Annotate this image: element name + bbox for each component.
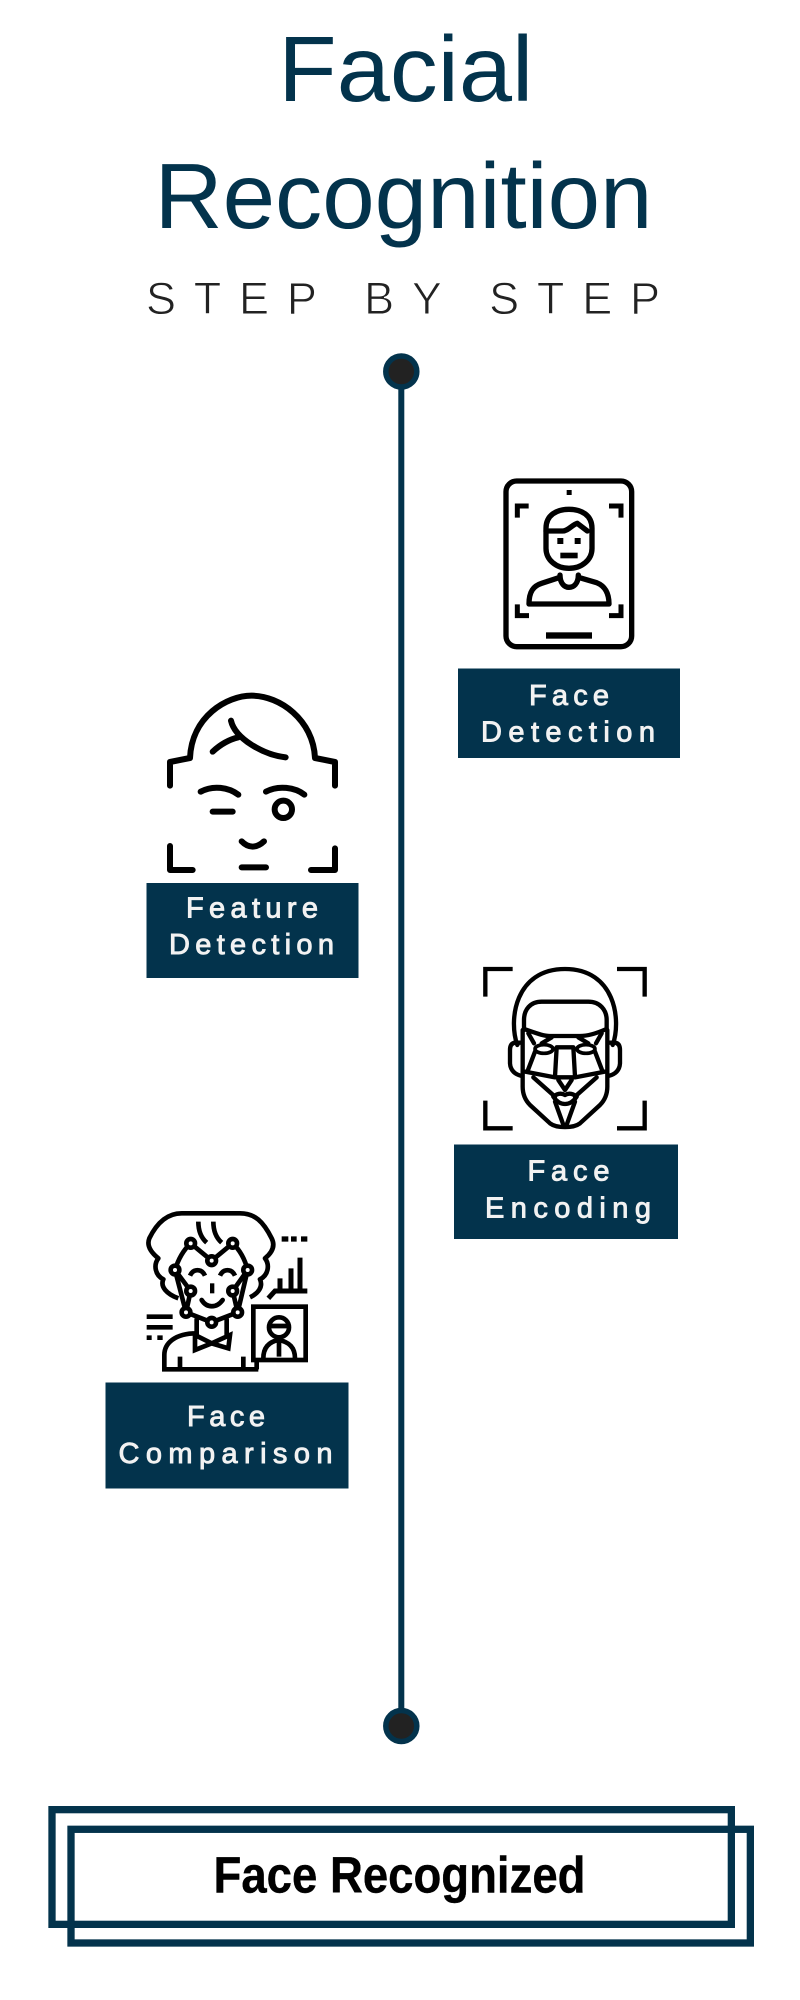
- label text: Detection: [481, 716, 655, 748]
- label text: [118, 1401, 332, 1470]
- result panel: face recognized: [52, 1810, 750, 1943]
- label text: Face: [187, 1401, 265, 1433]
- label text: Comparison: [118, 1438, 332, 1470]
- title: Facial: [278, 17, 533, 121]
- icon: face mesh: [485, 969, 645, 1128]
- subtitle: STEP BY STEP: [146, 273, 660, 324]
- label text: Face: [529, 680, 609, 712]
- label box: [454, 1144, 678, 1239]
- label text: [481, 680, 655, 748]
- step: feature detection: [146, 696, 358, 978]
- label text: Detection: [169, 929, 334, 961]
- title: Recognition: [154, 144, 652, 248]
- step: face encoding: [454, 969, 678, 1239]
- icon: tablet with face: [506, 481, 632, 647]
- timeline: [386, 356, 417, 1742]
- label box: [146, 883, 358, 978]
- label text: [169, 892, 334, 961]
- step: face comparison: [106, 1213, 348, 1488]
- icon: face features: [170, 696, 335, 870]
- step: face detection: [458, 481, 680, 758]
- double frame: [52, 1810, 750, 1943]
- label text: [485, 1156, 651, 1224]
- label text: Face: [528, 1156, 610, 1188]
- label box: [106, 1382, 348, 1488]
- result text: Face Recognized: [214, 1846, 586, 1904]
- label text: Encoding: [485, 1192, 651, 1224]
- icon: face comparison: [147, 1213, 307, 1369]
- label box: [458, 668, 680, 758]
- title: [154, 17, 652, 248]
- label text: Feature: [186, 892, 318, 924]
